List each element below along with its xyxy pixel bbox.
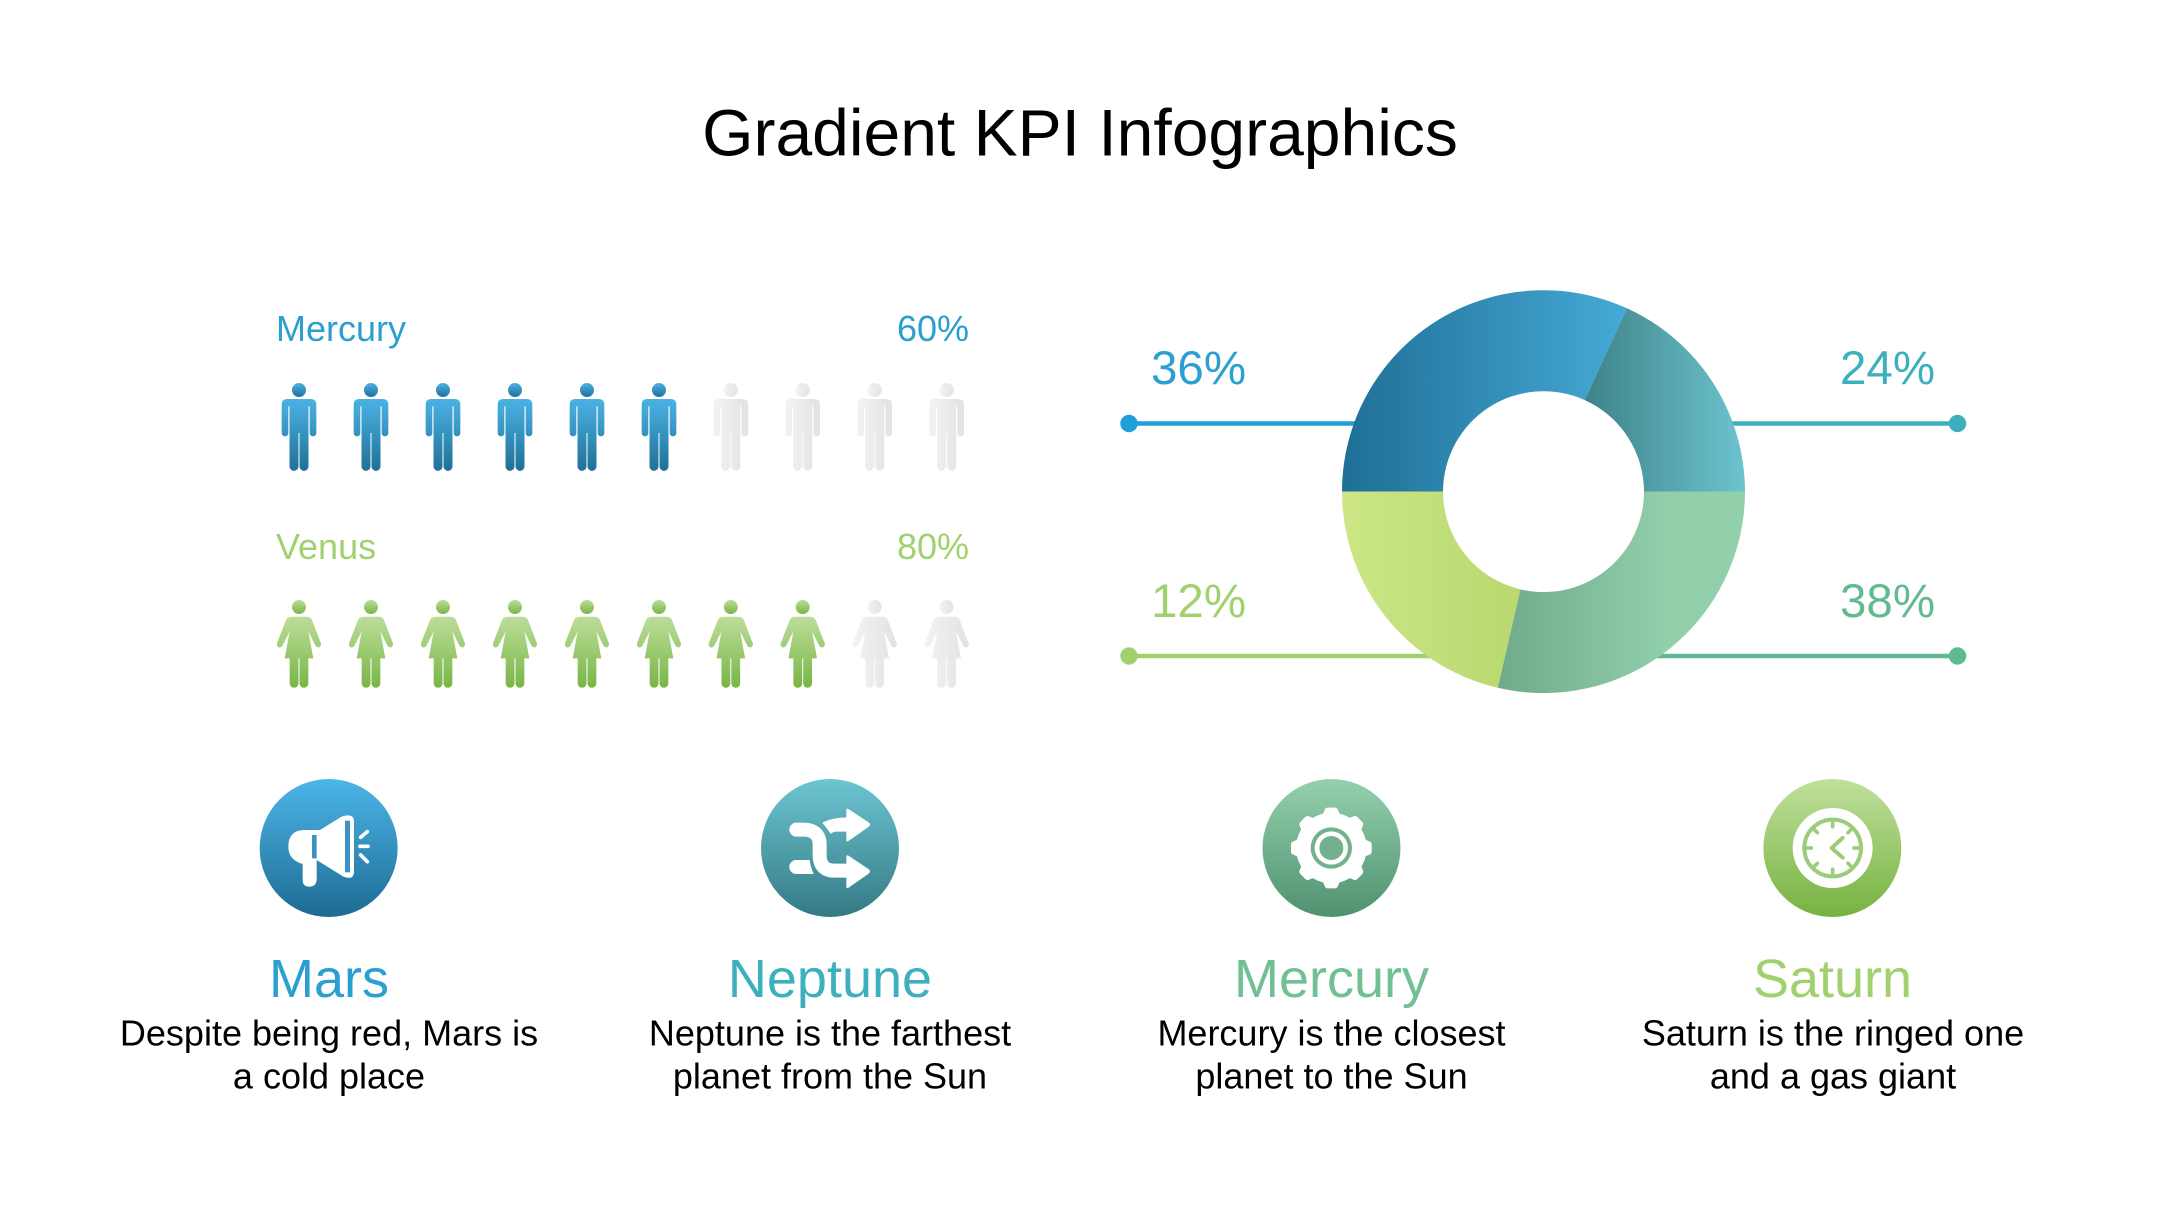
description: Mercury: planet to the Sun <box>1195 1056 1468 1097</box>
value: 12%: 12% <box>1151 575 1246 628</box>
title: Gradient KPI Infographics <box>702 96 1458 170</box>
heading: Mercury: Mercury <box>1234 949 1429 1009</box>
heading: Saturn: Saturn <box>1753 949 1912 1009</box>
value: 36%: 36% <box>1151 342 1246 395</box>
label: Venus: Venus <box>276 526 376 567</box>
icon: megaphone <box>260 779 398 917</box>
donut segment: teal 24% <box>1585 308 1745 492</box>
description: Saturn: and a gas giant <box>1710 1056 1956 1097</box>
description: Mercury: Mercury is the closest <box>1157 1013 1506 1054</box>
label: Mercury: Mercury <box>276 308 406 349</box>
panel: Neptune <box>649 779 1011 1097</box>
description: Saturn: Saturn is the ringed one <box>1642 1013 2024 1054</box>
donut segment: blue 36% <box>1342 290 1627 492</box>
leader: 36% <box>1120 415 1400 432</box>
icon: gear <box>1262 779 1400 917</box>
panel: Mars <box>120 779 538 1097</box>
heading: Neptune: Neptune <box>728 949 932 1009</box>
pictogram row: men 6 of 10 <box>282 383 964 471</box>
panel: donut chart <box>1120 290 1966 693</box>
donut segment: green 38% <box>1498 492 1745 693</box>
pictogram row: women 8 of 10 <box>277 600 969 688</box>
panel: Mercury <box>1157 779 1506 1097</box>
panel: people KPIs <box>276 308 969 688</box>
value: Venus 80%: 80% <box>897 526 969 567</box>
value: 38%: 38% <box>1840 575 1935 628</box>
icon: clock <box>1763 779 1901 917</box>
leader: 24% <box>1700 415 1966 432</box>
value: Mercury 60%: 60% <box>897 308 969 349</box>
donut segment: lime 12% <box>1342 492 1520 688</box>
leader: 38% <box>1620 647 1966 665</box>
value: 24%: 24% <box>1840 342 1935 395</box>
description: Mars: a cold place <box>233 1056 425 1097</box>
description: Mars: Despite being red, Mars is <box>120 1013 538 1054</box>
leader: 12% <box>1120 647 1470 665</box>
heading: Mars: Mars <box>269 949 389 1009</box>
description: Neptune: Neptune is the farthest <box>649 1013 1011 1054</box>
description: Neptune: planet from the Sun <box>673 1056 987 1097</box>
icon: shuffle arrows <box>761 779 899 917</box>
panel: Saturn <box>1642 779 2024 1097</box>
